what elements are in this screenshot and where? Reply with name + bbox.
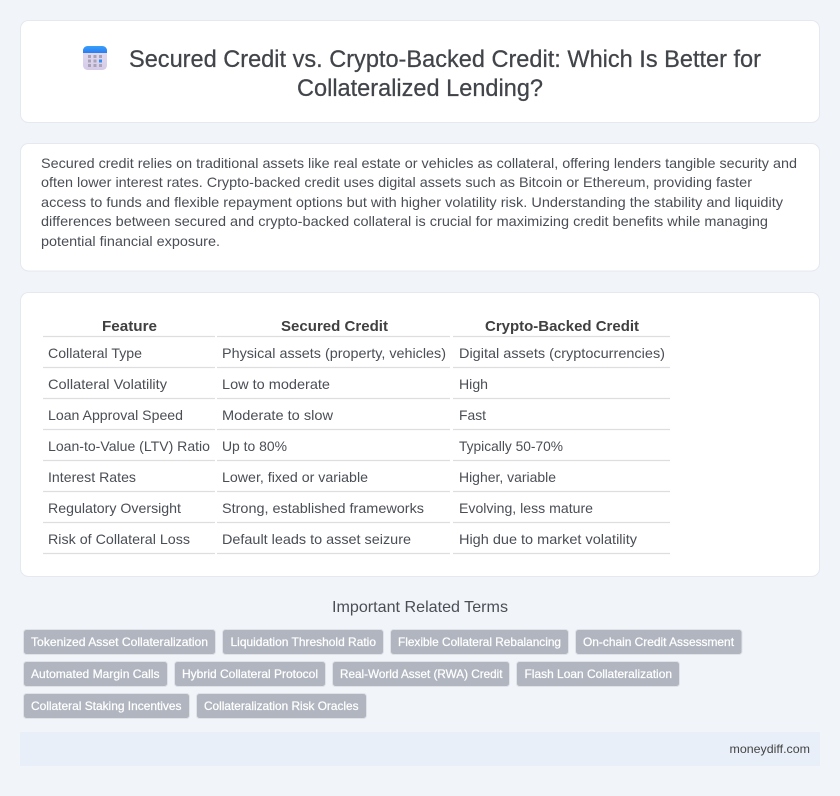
chip xyxy=(390,630,568,654)
title xyxy=(129,46,761,102)
table row: loan-to-value ratio: Typically 50-70% xyxy=(459,438,563,454)
table header xyxy=(102,318,639,335)
chip: Collateralization Risk Oracles xyxy=(204,699,358,713)
title: Secured Credit vs. Crypto-Backed Credit: Which Is Better for xyxy=(129,46,761,73)
text block: introduction xyxy=(41,155,797,249)
panel: title card xyxy=(20,20,820,122)
table row: collateral type xyxy=(48,345,665,361)
table row: risk of collateral loss: Default leads to asset seizure xyxy=(222,531,411,547)
table row: risk of collateral loss: Risk of Collateral Loss xyxy=(48,531,190,547)
text block: introduction: access to funds and flexible repayment options but with higher volatility risk. Understanding the stability and liquidity xyxy=(41,194,783,210)
footer xyxy=(20,732,820,766)
table row: regulatory oversight: Strong, established frameworks xyxy=(222,500,424,516)
table row: collateral volatility: High xyxy=(459,376,488,392)
table row: interest rates: Higher, variable xyxy=(459,469,556,485)
chip xyxy=(24,662,168,686)
chip: Liquidation Threshold Ratio xyxy=(230,635,376,649)
table row: collateral volatility xyxy=(48,376,488,392)
chip xyxy=(576,630,742,654)
table row: interest rates xyxy=(48,469,556,485)
chip xyxy=(222,630,384,654)
chip xyxy=(516,662,680,686)
text block: introduction: potential financial exposure. xyxy=(41,233,220,249)
chip: On-chain Credit Assessment xyxy=(583,635,735,649)
table header: Crypto-Backed Credit xyxy=(485,318,639,335)
footer text: moneydiff.com: moneydiff.com xyxy=(730,742,810,756)
table row: risk of collateral loss xyxy=(48,531,637,547)
table row: loan-to-value ratio xyxy=(48,438,563,454)
table row: loan approval speed: Fast xyxy=(459,407,486,423)
chip xyxy=(332,662,510,686)
table row: risk of collateral loss: High due to market volatility xyxy=(459,531,637,547)
table row: regulatory oversight: Regulatory Oversight xyxy=(48,500,181,516)
chip xyxy=(196,694,366,718)
table header: Secured Credit xyxy=(281,318,388,335)
text block: introduction: differences between secured and crypto-backed collateral is crucial for maximizing credit benefits while managing xyxy=(41,213,768,229)
table row: loan approval speed xyxy=(48,407,486,423)
table row: regulatory oversight: Evolving, less mature xyxy=(459,500,593,516)
panel: introduction text xyxy=(20,144,820,271)
chip: Real-World Asset (RWA) Credit xyxy=(340,667,503,681)
text block: introduction: Secured credit relies on traditional assets like real estate or vehicles as collateral, offering lenders tangible security and xyxy=(41,155,797,171)
icon: calendar xyxy=(83,46,107,70)
table row: collateral volatility: Low to moderate xyxy=(222,376,330,392)
table row: loan approval speed: Moderate to slow xyxy=(222,407,334,423)
related terms chips xyxy=(24,630,742,718)
chip xyxy=(24,694,190,718)
table row: loan approval speed: Loan Approval Speed xyxy=(48,407,183,423)
table header: Feature xyxy=(102,318,157,335)
title: Collateralized Lending? xyxy=(297,75,543,102)
chip: Hybrid Collateral Protocol xyxy=(182,667,318,681)
heading: important related terms: Important Related Terms xyxy=(332,599,508,616)
chip xyxy=(174,662,326,686)
text block: introduction: often lower interest rates. Crypto-backed credit uses digital assets such as Bitcoin or Ethereum, providing faster xyxy=(41,174,752,190)
table row: interest rates: Lower, fixed or variable xyxy=(222,469,368,485)
table row: interest rates: Interest Rates xyxy=(48,469,136,485)
table row: regulatory oversight xyxy=(48,500,593,516)
chip xyxy=(24,630,216,654)
chip: Flash Loan Collateralization xyxy=(524,667,672,681)
panel: comparison table xyxy=(20,292,820,576)
chip: Flexible Collateral Rebalancing xyxy=(398,635,561,649)
chip: Automated Margin Calls xyxy=(31,667,160,681)
table row: collateral volatility: Collateral Volatility xyxy=(48,376,167,392)
table row: collateral type: Collateral Type xyxy=(48,345,142,361)
table row: loan-to-value ratio: Loan-to-Value (LTV) Ratio xyxy=(48,438,210,454)
table row: collateral type: Digital assets (cryptocurrencies) xyxy=(459,345,665,361)
chip: Tokenized Asset Collateralization xyxy=(31,635,208,649)
table row: collateral type: Physical assets (property, vehicles) xyxy=(222,345,446,361)
chip: Collateral Staking Incentives xyxy=(31,699,182,713)
table row: loan-to-value ratio: Up to 80% xyxy=(222,438,287,454)
